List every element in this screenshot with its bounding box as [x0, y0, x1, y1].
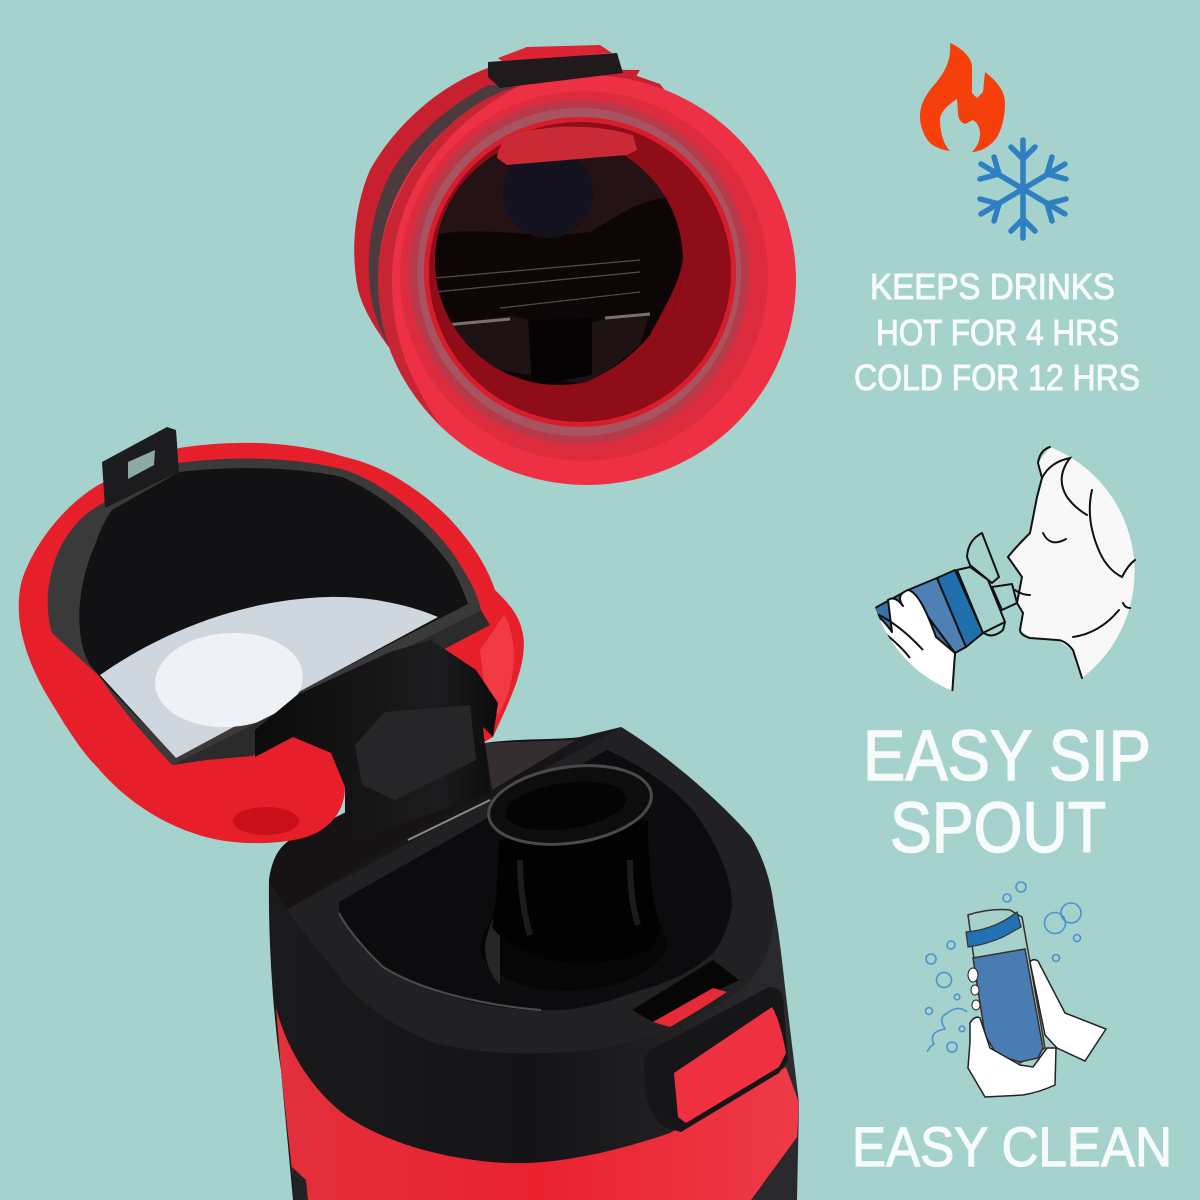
- icon: snowflake: [980, 140, 1066, 238]
- cap body rear rim: [354, 68, 640, 353]
- spout base: [480, 890, 668, 991]
- latch slot: [632, 960, 739, 1022]
- heading: easy sip spout: SPOUT: [890, 789, 1106, 868]
- cap front ring: [378, 75, 796, 485]
- hinge block highlight: [355, 705, 476, 800]
- cap tab: [498, 45, 612, 62]
- bubbles: [926, 882, 1081, 1052]
- heading: easy sip spout: [863, 717, 1151, 868]
- cap interior: [435, 153, 683, 385]
- icon: flame: [920, 43, 1005, 152]
- lid strap hole: [233, 807, 299, 835]
- white seal: [100, 597, 438, 758]
- latch button: [644, 987, 788, 1132]
- icon: person sipping from bottle: [875, 446, 1136, 692]
- red band: [276, 1007, 799, 1200]
- spout neck: [492, 820, 660, 963]
- text: keeps drinks hot and cold: KEEPS DRINKS: [870, 266, 1115, 307]
- clean bottle outline: [968, 910, 1045, 1063]
- lid lower dark edge: [172, 610, 490, 765]
- spout mouth: [484, 756, 656, 854]
- heading: easy sip spout: EASY SIP: [863, 717, 1151, 796]
- clean bottle band: [966, 912, 1021, 947]
- text: keeps drinks hot and cold: COLD FOR 12 HRS: [854, 357, 1140, 398]
- lid tab: [102, 427, 179, 508]
- sip bottle: [875, 532, 1017, 692]
- photo: flip lid opened: [19, 427, 524, 843]
- icon: hands cleaning bottle with bubbles: [926, 882, 1106, 1097]
- text: keeps drinks hot and cold: [854, 266, 1140, 398]
- clean bottle body: [973, 949, 1043, 1062]
- lid interior: [79, 468, 468, 755]
- lower hand: [968, 1017, 1056, 1097]
- face: [1008, 447, 1135, 678]
- photo: black bottle top with spout: [269, 727, 799, 1200]
- right hand: [1030, 960, 1106, 1061]
- holding hand: [878, 589, 956, 692]
- hinge: [255, 640, 498, 843]
- lid gasket: [48, 459, 481, 765]
- photo: red bottle cap seen from below: [354, 45, 796, 485]
- lid red shell: [19, 443, 524, 843]
- recessed glossy area: [339, 750, 732, 1010]
- lid top surface: [286, 727, 774, 1053]
- cap inner flap: [497, 126, 637, 165]
- bottle silhouette: [269, 727, 799, 1200]
- white pad: [152, 628, 306, 732]
- text: keeps drinks hot and cold: HOT FOR 4 HRS: [876, 312, 1119, 353]
- heading: easy clean: EASY CLEAN: [852, 1115, 1172, 1178]
